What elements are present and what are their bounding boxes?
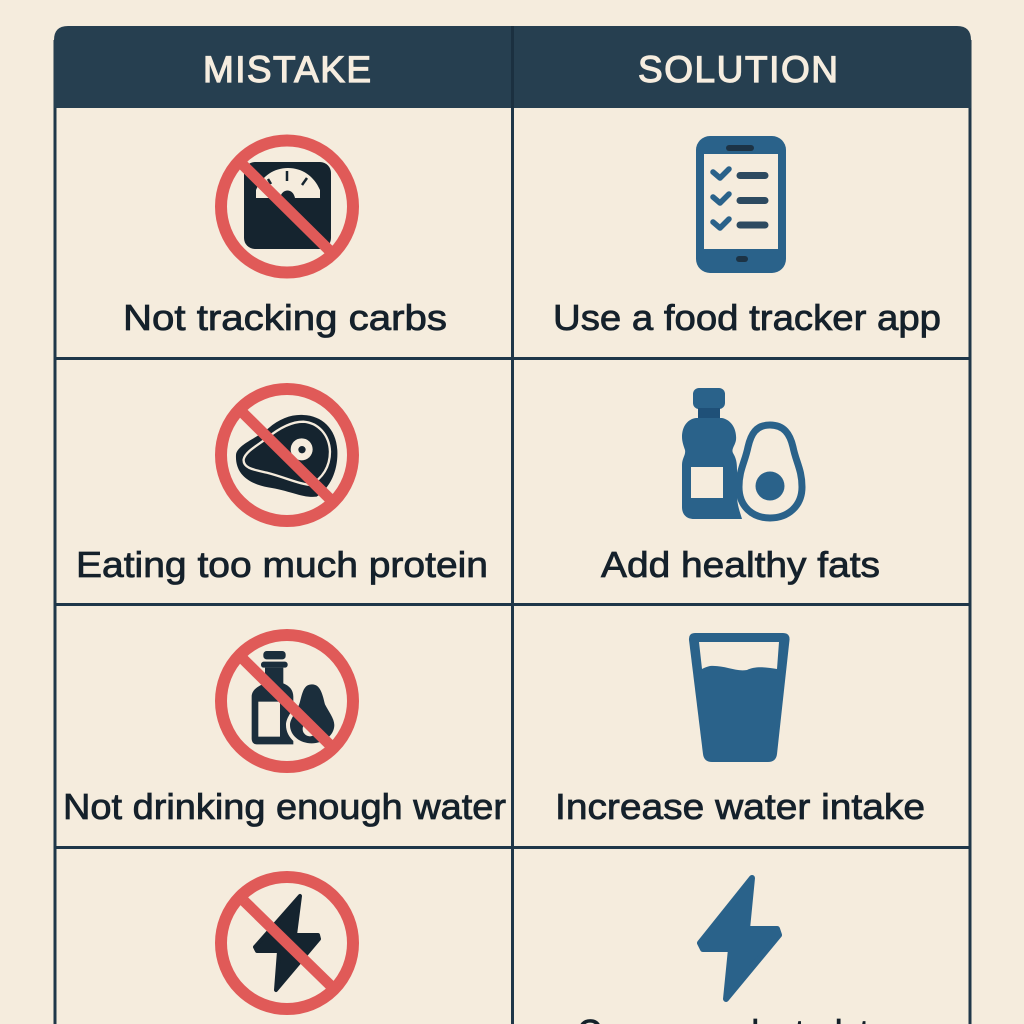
label: add healthy fats: Add healthy fats xyxy=(601,544,880,585)
heading: solution: SOLUTION xyxy=(638,49,838,90)
icon: prohibited scale xyxy=(221,140,353,272)
label: use a food tracker app: Use a food tracker app xyxy=(553,297,941,338)
label: not drinking enough water: Not drinking enough water xyxy=(63,786,506,827)
label: increase water intake: Increase water intake xyxy=(555,786,925,827)
icon: bottle and avocado xyxy=(682,388,802,519)
icon: prohibited steak xyxy=(221,389,353,521)
icon: prohibited bottle and avocado xyxy=(221,635,353,767)
icon: prohibited lightning bolt xyxy=(221,877,353,1009)
icon: lightning bolt xyxy=(700,878,779,999)
icon: water glass xyxy=(689,633,790,762)
label: not tracking carbs: Not tracking carbs xyxy=(123,297,447,338)
heading: mistake: MISTAKE xyxy=(203,49,371,90)
header bar xyxy=(54,26,971,108)
label: eating too much protein: Eating too much protein xyxy=(76,544,488,585)
icon: phone tracker app xyxy=(696,136,786,273)
